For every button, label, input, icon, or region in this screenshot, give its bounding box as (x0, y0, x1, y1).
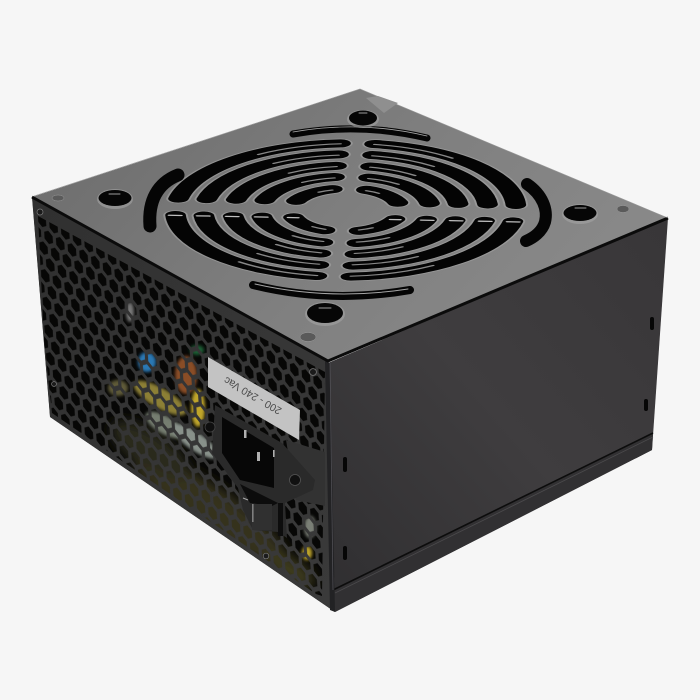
voltage label: 200 - 240 Vac (222, 374, 284, 417)
socket pins (244, 430, 275, 461)
product photo: ATX power supply (31, 88, 668, 612)
corner rivets (52, 195, 629, 342)
solid area beside the socket (286, 440, 325, 506)
small side slots (343, 317, 654, 560)
voltage label (208, 357, 300, 440)
plate screws (37, 209, 316, 559)
fan mounting screws (97, 110, 598, 326)
power switch (240, 484, 278, 506)
internal components seen through the vents (32, 197, 335, 612)
panel: side of the case (325, 218, 668, 612)
inlet screw (290, 474, 300, 486)
logo sticker (366, 96, 398, 113)
panel: perforated rear plate (32, 197, 335, 612)
power inlet module (205, 405, 315, 538)
fan grille rings (159, 140, 533, 280)
panel: top plate with fan grille (32, 89, 668, 361)
outer vent slots (150, 127, 546, 296)
